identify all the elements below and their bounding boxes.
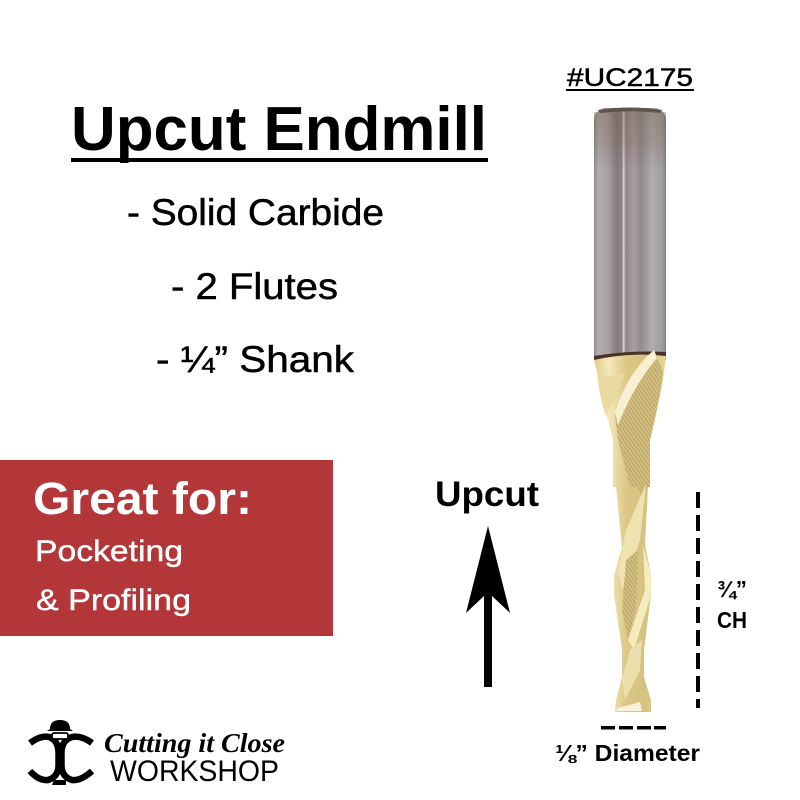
bit body <box>594 350 666 712</box>
panel text: profiling: & Profiling <box>36 584 191 617</box>
icon: logo mark <box>30 720 92 785</box>
dimension: cut height dashes <box>696 492 700 708</box>
panel heading: Great for: <box>33 473 252 524</box>
panel text: pocketing: Pocketing <box>35 535 183 568</box>
dimension label: cut height: ¾” <box>717 576 747 602</box>
feature: shank: - ¼” Shank <box>156 339 355 380</box>
dimension: diameter dashes <box>601 726 666 730</box>
arrow: upward <box>466 526 510 687</box>
feature: solid carbide: - Solid Carbide <box>127 192 384 233</box>
flute: lower spirals <box>618 484 646 590</box>
dimension label: cut height: CH <box>717 607 747 633</box>
endmill photo illustration <box>594 108 666 712</box>
feature list <box>127 192 384 380</box>
flute: upper <box>615 350 663 487</box>
title: Upcut Endmill <box>71 95 487 164</box>
upcut label: Upcut <box>435 475 539 514</box>
part number: #UC2175 <box>567 64 693 92</box>
bit shank <box>594 108 666 360</box>
dimension label: diameter: ⅛” Diameter <box>555 740 700 766</box>
feature: flutes: - 2 Flutes <box>171 266 338 307</box>
panel: great for <box>0 460 333 636</box>
logo script text: Cutting it Close <box>104 728 285 758</box>
logo wordmark: WORKSHOP <box>110 755 279 788</box>
dimension label: cut height <box>717 576 747 633</box>
logo: cutting it close workshop <box>30 720 285 788</box>
